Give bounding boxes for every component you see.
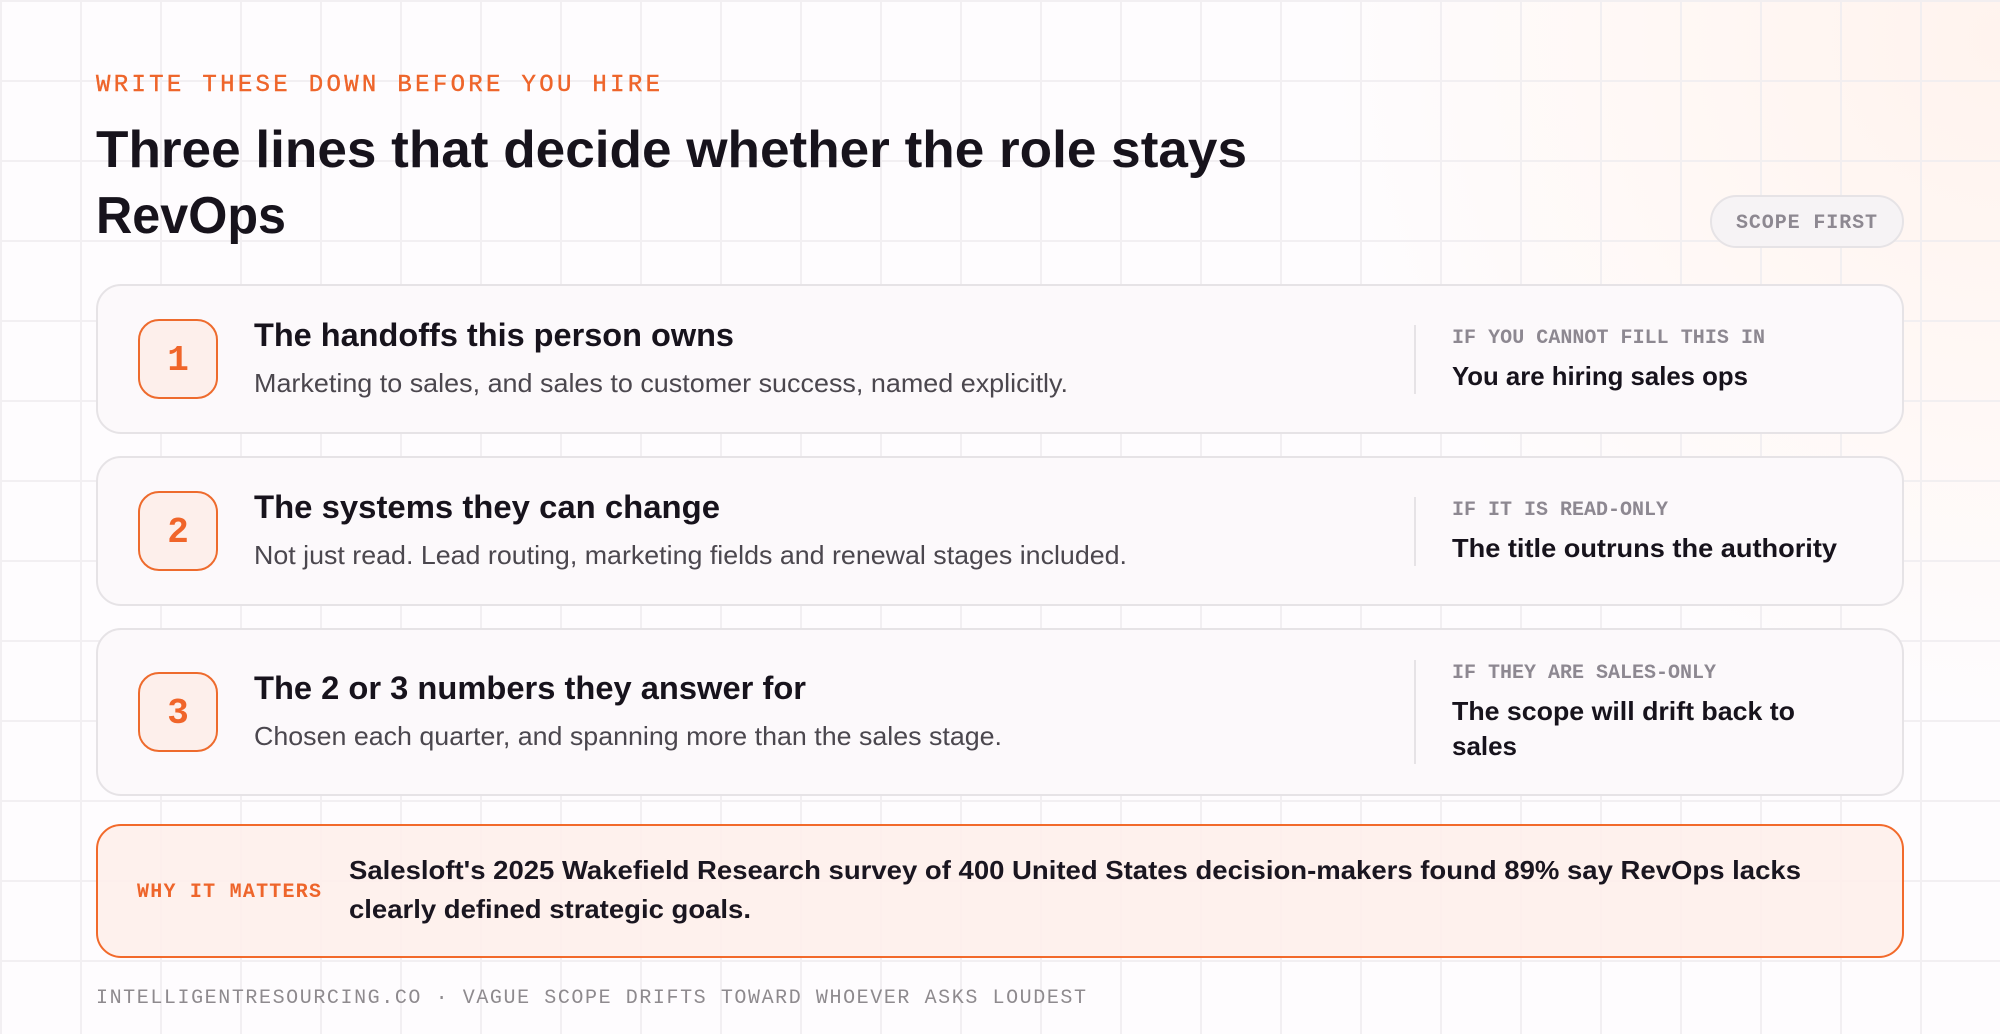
number badge 2 xyxy=(139,492,217,570)
description: systems: Not just read. Lead routing, marketing fields and renewal stages included. xyxy=(254,540,1127,570)
consequence: numbers: IF THEY ARE SALES-ONLY xyxy=(1452,662,1716,685)
callout label: WHY IT MATTERS xyxy=(137,881,321,904)
callout text xyxy=(349,855,1801,924)
number badge 1 xyxy=(139,320,217,398)
consequence: numbers: sales xyxy=(1452,731,1517,761)
number badge 1: 1 xyxy=(167,340,189,381)
consequence: handoffs xyxy=(1452,327,1765,391)
consequence: handoffs: You are hiring sales ops xyxy=(1452,361,1748,391)
heading: systems: The systems they can change xyxy=(254,489,720,525)
consequence: numbers xyxy=(1452,662,1795,761)
description: numbers: Chosen each quarter, and spanning more than the sales stage. xyxy=(254,721,1002,751)
callout text: clearly defined strategic goals. xyxy=(349,894,751,924)
consequence: systems xyxy=(1452,499,1838,563)
number badge 3 xyxy=(139,673,217,751)
footer: INTELLIGENTRESOURCING.CO · VAGUE SCOPE DRIFTS TOWARD WHOEVER ASKS LOUDEST xyxy=(96,987,1086,1010)
consequence: systems: The title outruns the authority xyxy=(1452,533,1838,563)
badge: scope first xyxy=(1711,196,1903,247)
consequence: numbers: The scope will drift back to xyxy=(1452,696,1795,726)
title xyxy=(96,121,1247,245)
eyebrow: WRITE THESE DOWN BEFORE YOU HIRE xyxy=(96,72,660,99)
panel: line 1, handoffs xyxy=(97,285,1903,433)
consequence: handoffs: IF YOU CANNOT FILL THIS IN xyxy=(1452,327,1765,350)
heading: numbers: The 2 or 3 numbers they answer for xyxy=(254,670,806,706)
callout text: Salesloft's 2025 Wakefield Research survey of 400 United States decision-makers found 89% say RevOps lacks xyxy=(349,855,1801,885)
title: Three lines that decide whether the role stays xyxy=(96,121,1247,179)
panel: line 2, systems xyxy=(97,457,1903,605)
title: RevOps xyxy=(96,187,286,245)
badge: scope first: SCOPE FIRST xyxy=(1736,212,1877,235)
callout: why it matters xyxy=(97,825,1903,957)
description: handoffs: Marketing to sales, and sales to customer success, named explicitly. xyxy=(254,368,1068,398)
consequence: systems: IF IT IS READ-ONLY xyxy=(1452,499,1668,522)
number badge 2: 2 xyxy=(167,512,189,553)
panel: line 3, numbers xyxy=(97,629,1903,795)
number badge 3: 3 xyxy=(167,693,189,734)
heading: handoffs: The handoffs this person owns xyxy=(254,317,734,353)
